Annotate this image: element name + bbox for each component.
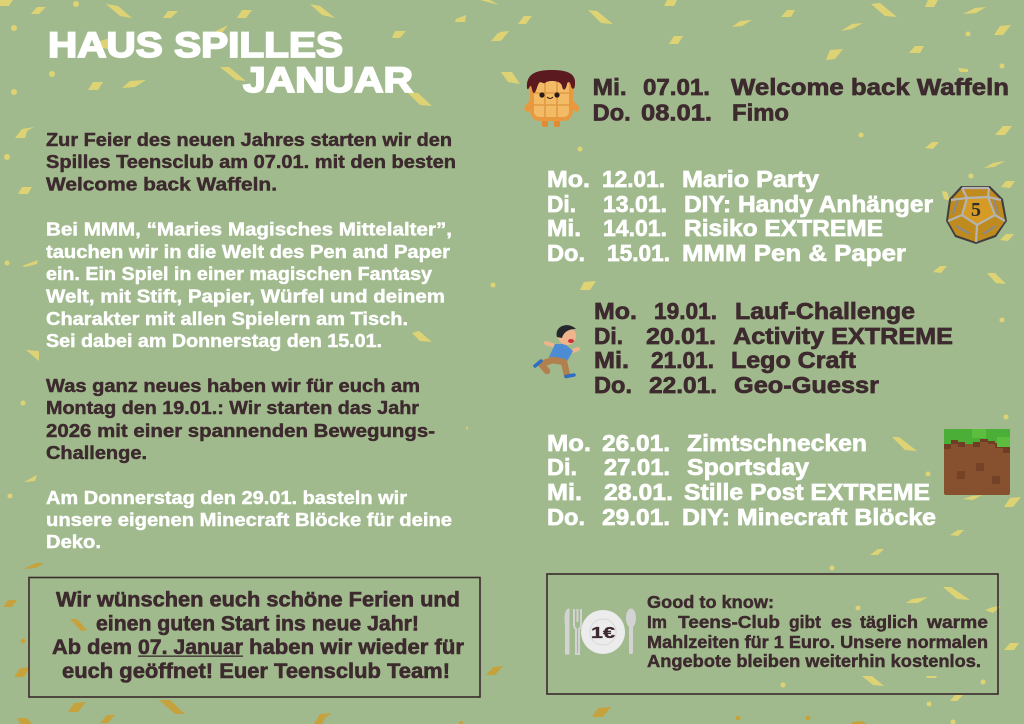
- schedule: week 3: Do.: [594, 372, 632, 398]
- text block: intro: Zur Feier des neuen Jahres starten wir den: [46, 130, 452, 150]
- schedule: week 2: [547, 166, 933, 266]
- schedule: week 3: Geo-Guessr: [734, 372, 879, 398]
- schedule: week 2: MMM Pen & Paper: [682, 240, 906, 266]
- schedule: week 3: 21.01.: [651, 347, 714, 373]
- schedule: week 4: DIY: Minecraft Blöcke: [682, 504, 936, 530]
- schedule: week 4: Sportsday: [687, 454, 809, 480]
- icon: plate with cutlery: 1€: [591, 625, 615, 642]
- title: [48, 26, 413, 100]
- schedule: week 3: [594, 298, 953, 398]
- schedule: week 4: 28.01.: [604, 479, 673, 505]
- text block: MMM pen and paper: [46, 220, 452, 351]
- icon: running boy: [535, 325, 578, 376]
- text block: movement challenge: Challenge.: [46, 443, 147, 463]
- schedule: week 4: 27.01.: [604, 454, 670, 480]
- text block: Minecraft craft: Am Donnerstag den 29.01. basteln wir: [46, 488, 407, 508]
- schedule: week 3: 19.01.: [654, 298, 717, 324]
- schedule: week 4: Mi.: [547, 479, 582, 505]
- schedule: week 4: [547, 430, 936, 530]
- schedule: week 1: Mi.: [593, 74, 627, 100]
- text block: good to know: es: [831, 612, 852, 632]
- text block: good to know: Good to know:: [647, 592, 774, 612]
- panel: holiday greeting: euch geöffnet! Euer Teensclub Team!: [62, 660, 450, 683]
- schedule: week 1: Fimo: [732, 100, 789, 126]
- schedule: week 2: 12.01.: [602, 166, 665, 192]
- icon: twelve-sided die: 5: [971, 199, 981, 221]
- text block: movement challenge: 2026 mit einer spannenden Bewegungs-: [46, 421, 435, 441]
- panel: holiday greeting: Ab dem: [52, 636, 132, 659]
- schedule: week 2: 13.01.: [603, 191, 667, 217]
- schedule: week 3: 20.01.: [646, 323, 716, 349]
- text block: intro: Welcome back Waffeln.: [46, 174, 277, 194]
- text block: intro: [46, 130, 456, 194]
- text block: MMM pen and paper: Welt, mit Stift, Papier, Würfel und deinem: [46, 286, 445, 306]
- schedule: week 3: Lauf-Challenge: [735, 298, 915, 324]
- schedule: week 3: Lego Craft: [731, 347, 856, 373]
- text block: MMM pen and paper: ein. Ein Spiel in einer magischen Fantasy: [46, 264, 432, 284]
- icon: Minecraft grass block: [944, 429, 1010, 495]
- schedule: week 1: 08.01.: [641, 100, 712, 126]
- text block: Minecraft craft: unsere eigenen Minecraft Blöcke für deine: [46, 510, 452, 530]
- schedule: week 2: Risiko EXTREME: [684, 215, 883, 241]
- schedule: week 1: [593, 74, 1009, 126]
- text block: good to know: [647, 592, 988, 671]
- schedule: week 4: 29.01.: [602, 504, 670, 530]
- text block: movement challenge: Montag den 19.01.: Wir starten das Jahr: [46, 398, 419, 418]
- schedule: week 4: Zimtschnecken: [687, 430, 867, 456]
- text block: good to know: täglich: [860, 612, 918, 632]
- schedule: week 4: Stille Post EXTREME: [684, 479, 930, 505]
- schedule: week 2: Di.: [547, 191, 576, 217]
- text block: intro: Spilles Teensclub am 07.01. mit den besten: [46, 152, 456, 172]
- text block: Minecraft craft: Deko.: [46, 532, 101, 552]
- text block: good to know: Teens-Club: [678, 612, 780, 632]
- schedule: week 3: Activity EXTREME: [733, 323, 953, 349]
- confetti: dark gold: [3, 563, 867, 724]
- schedule: week 4: Do.: [547, 504, 585, 530]
- schedule: week 3: Mi.: [594, 347, 629, 373]
- text block: good to know: Angebote bleiben weiterhin kostenlos.: [647, 651, 981, 671]
- text block: movement challenge: Was ganz neues haben wir für euch am: [46, 376, 420, 396]
- schedule: week 4: 26.01.: [602, 430, 670, 456]
- title: HAUS SPILLES: [48, 26, 343, 65]
- schedule: week 3: Mo.: [594, 298, 637, 324]
- schedule: week 3: Di.: [594, 323, 623, 349]
- schedule: week 2: DIY: Handy Anhänger: [684, 191, 933, 217]
- icon: plate with cutlery: [565, 608, 636, 654]
- schedule: week 1: Do.: [593, 100, 631, 126]
- text block: MMM pen and paper: Bei MMM, “Maries Magisches Mittelalter”,: [46, 220, 452, 240]
- schedule: week 2: Mo.: [547, 166, 590, 192]
- schedule: week 2: Mario Party: [682, 166, 819, 192]
- panel: holiday greeting: Wir wünschen euch schöne Ferien und: [56, 588, 460, 612]
- panel: holiday greeting: 07. Januar: [138, 636, 243, 659]
- panel: holiday greeting: einen guten Start ins neue Jahr!: [96, 612, 419, 636]
- icon: twelve-sided die: [946, 186, 1007, 244]
- schedule: week 1: 07.01.: [643, 74, 710, 100]
- panel: holiday greeting: haben wir wieder für: [249, 636, 464, 659]
- schedule: week 2: Do.: [547, 240, 585, 266]
- icon: waffle: [524, 70, 580, 127]
- schedule: week 2: 15.01.: [607, 240, 670, 266]
- schedule: week 1: Welcome back Waffeln: [731, 74, 1009, 100]
- schedule: week 2: 14.01.: [603, 215, 667, 241]
- title: JANUAR: [243, 61, 413, 100]
- panel: holiday greeting: [29, 578, 480, 697]
- schedule: week 3: 22.01.: [649, 372, 717, 398]
- text block: Minecraft craft: [46, 488, 452, 552]
- text block: good to know: Mahlzeiten für 1 Euro. Unsere normalen: [647, 632, 988, 652]
- text block: MMM pen and paper: tauchen wir in die Welt des Pen and Paper: [46, 242, 450, 262]
- panel: good to know: [547, 574, 998, 694]
- text block: good to know: warme: [926, 612, 988, 632]
- text block: movement challenge: [46, 376, 435, 463]
- schedule: week 2: Mi.: [547, 215, 581, 241]
- text block: MMM pen and paper: Charakter mit allen Spielern am Tisch.: [46, 309, 408, 329]
- text block: MMM pen and paper: Sei dabei am Donnerstag den 15.01.: [46, 331, 382, 351]
- schedule: week 4: Mo.: [547, 430, 591, 456]
- schedule: week 4: Di.: [547, 454, 577, 480]
- text block: good to know: Im: [647, 612, 667, 632]
- text block: good to know: gibt: [789, 612, 821, 632]
